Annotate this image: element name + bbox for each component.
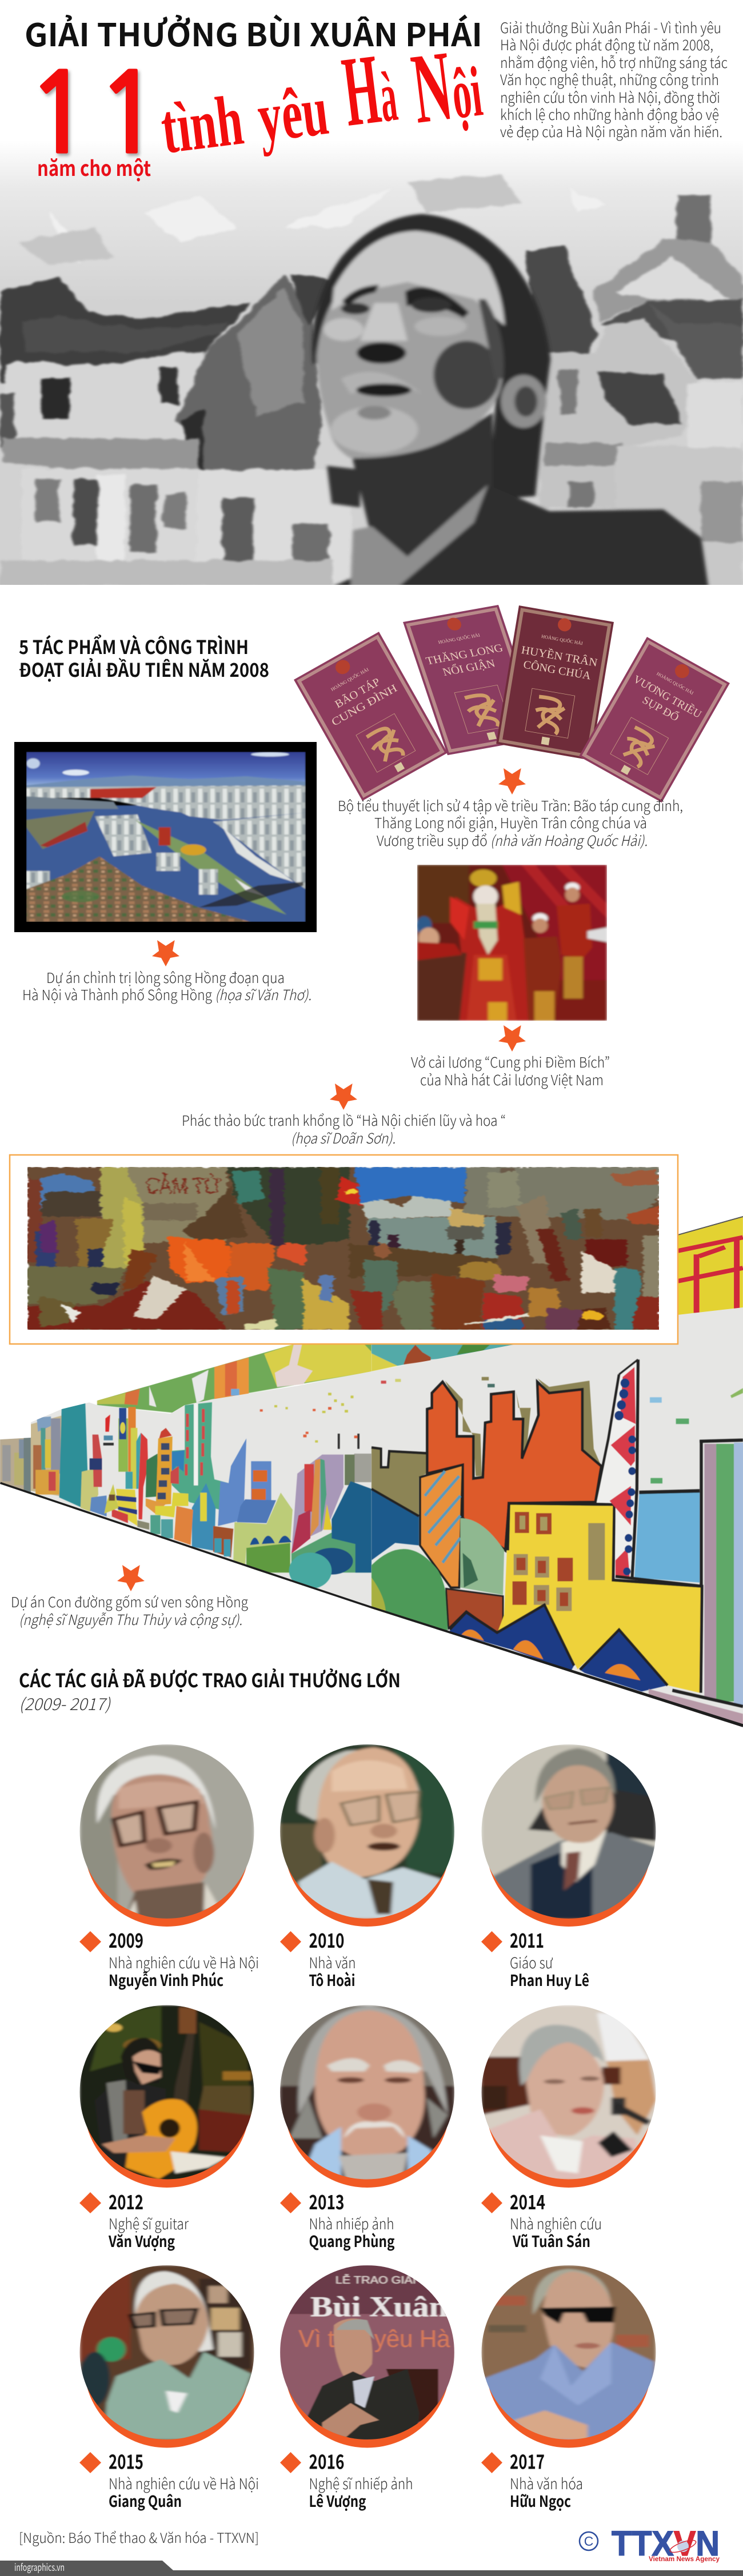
portrait: Phan Huy Le (481, 1744, 656, 1919)
intro paragraph: vẻ đẹp của Hà Nội ngàn năm văn hiến. (500, 121, 722, 142)
text 2013 (309, 2186, 394, 2252)
skyline: left part of mosaic (0, 1393, 372, 1589)
book: Bao tap cung dinh: BÃO TÁP (333, 675, 382, 711)
diamond 2009 (79, 1931, 101, 1952)
painting: Ha Noi chien luy va hoa: CẢM TỬ (145, 1173, 221, 1199)
winner 2010 (279, 1744, 455, 1927)
text 2010 (309, 1925, 355, 1991)
skyline: right part of mosaic (372, 1359, 743, 1729)
caption: books: Bộ tiểu thuyết lịch sử 4 tập về triều Trần: Bão táp cung đình, (338, 795, 683, 816)
intro paragraph: nghiên cứu tôn vinh Hà Nội, đồng thời (500, 86, 720, 107)
book: Huyen Tran cong chua: CÔNG CHÚA (522, 657, 592, 683)
calligraphic title: tinh yeu Ha Noi: tình (157, 81, 247, 169)
text 2009: Nhà nghiên cứu về Hà Nội (109, 1952, 259, 1973)
text 2012 (108, 2186, 189, 2252)
caption: books: Thăng Long nổi giận, Huyền Trân công chúa và (374, 812, 647, 833)
logo: TTXVN Vietnam News Agency: Vietnam News Agency (649, 2555, 720, 2563)
text 2011: Giáo sư (510, 1952, 553, 1973)
text 2012: Văn Vượng (108, 2229, 175, 2252)
front wall: white tile ground (0, 1307, 743, 1727)
portrait: Nguyen Vinh Phuc (79, 1744, 255, 1920)
star: painting (330, 1084, 357, 1110)
text 2016: Nghệ sĩ nhiếp ảnh (309, 2473, 413, 2494)
books: 4-volume historical novel (294, 605, 730, 803)
heading: 5 works: 5 TÁC PHẨM VÀ CÔNG TRÌNH (19, 632, 249, 660)
book: Bao tap cung dinh: CUNG ĐÌNH (329, 681, 400, 729)
text 2015: Giang Quân (109, 2489, 182, 2511)
text 2015: Nhà nghiên cứu về Hà Nội (109, 2473, 259, 2494)
text 2011: 2011 (510, 1925, 544, 1954)
calligraphic title: tinh yeu Ha Noi: Nội (406, 26, 487, 145)
star: city project (152, 940, 179, 966)
text 2009: Nguyễn Vinh Phúc (109, 1968, 223, 1991)
back wall: right yellow section with red frame (678, 1216, 743, 1315)
book: Huyen Tran cong chua: HOÀNG QUỐC HẢI (541, 633, 584, 646)
painting: Ha Noi chien luy va hoa (27, 1167, 660, 1331)
image: cai luong stage performance (417, 865, 607, 1021)
intro paragraph (500, 17, 728, 142)
caption: cai luong (411, 1052, 610, 1090)
text 2009: 2009 (109, 1925, 143, 1954)
hero photo: painter portrait in front of old Hanoi houses (0, 137, 743, 592)
caption: books (338, 795, 683, 850)
text 2012: Nghệ sĩ guitar (109, 2213, 189, 2234)
big number 11: 11 (26, 60, 163, 170)
portrait: Le Vuong at award ceremony (279, 2265, 455, 2441)
heading: award winners: CÁC TÁC GIẢ ĐÃ ĐƯỢC TRAO GIẢI THƯỞNG LỚN (19, 1666, 401, 1693)
intro paragraph: Giải thưởng Bùi Xuân Phái - Vì tình yêu (500, 17, 721, 38)
diamond 2010 (280, 1931, 301, 1952)
intro paragraph: khích lệ cho những hành động bảo vệ (500, 103, 719, 125)
book: Vuong trieu sup do (579, 637, 730, 803)
intro paragraph: Hà Nội được phát động từ năm 2008, (500, 34, 713, 55)
book: Huyen Tran cong chua: HUYỀN TRÂN (520, 643, 598, 669)
caption: ceramic road: Dự án Con đường gốm sứ ven sông Hồng (11, 1591, 248, 1612)
text 2009 (109, 1925, 259, 1991)
text 2017 (510, 2446, 583, 2511)
caption: ceramic road: (nghệ sĩ Nguyễn Thu Thủy và cộng sự). (19, 1609, 242, 1630)
image: Red River city project render (14, 742, 317, 932)
book: Thang Long noi gian: NỔI GIẬN (441, 656, 497, 679)
winner 2015 (79, 2265, 255, 2448)
winner 2016 (279, 2265, 455, 2448)
winner 2009 (79, 1744, 255, 1927)
winner 2013 (279, 2005, 455, 2188)
text 2013: 2013 (309, 2186, 344, 2216)
text 2017: Nhà văn hóa (510, 2473, 583, 2494)
framed box: Ha Noi painting (10, 1155, 678, 1344)
diamond 2016 (280, 2452, 301, 2473)
subheading: years: (2009- 2017) (19, 1691, 111, 1715)
caption: cai luong: Vở cải lương “Cung phi Điềm Bích” (411, 1052, 610, 1072)
caption: books: Vương triều sụp đổ (nhà văn Hoàng Quốc Hải). (377, 830, 648, 850)
portrait: To Hoai (279, 1744, 455, 1919)
text 2011: Phan Huy Lê (510, 1968, 589, 1991)
winner 2011 (481, 1744, 656, 1927)
text 2010: Nhà văn (309, 1952, 355, 1973)
portrait: Le Vuong at award ceremony: LỄ TRAO GIẢI (335, 2274, 416, 2286)
book: Huyen Tran cong chua (496, 605, 614, 760)
text 2010: Tô Hoài (309, 1968, 355, 1991)
text 2014: Nhà nghiên cứu (510, 2213, 602, 2234)
portrait: Huu Ngoc (481, 2265, 656, 2441)
source note: [Nguồn: Báo Thể thao & Văn hóa - TTXVN] (19, 2527, 259, 2547)
calligraphic title: tinh yeu Ha Noi: yêu (254, 71, 333, 158)
text 2013: Nhà nhiếp ảnh (309, 2213, 394, 2234)
text 2012: 2012 (109, 2186, 143, 2216)
book: Thang Long noi gian: THĂNG LONG (424, 641, 505, 667)
book: Thang Long noi gian (403, 605, 543, 755)
caption: painting (182, 1110, 506, 1148)
text 2011 (510, 1925, 589, 1991)
book: Bao tap cung dinh (294, 632, 448, 801)
diamond 2015 (79, 2452, 101, 2473)
text 2017: Hữu Ngọc (510, 2489, 571, 2511)
star: cai luong (498, 1025, 526, 1052)
portrait: Quang Phung (279, 2005, 455, 2181)
caption: painting: (họa sĩ Doãn Sơn). (291, 1127, 396, 1148)
back wall: upper painted layer (97, 1342, 372, 1413)
text 2014 (510, 2186, 602, 2252)
winner 2012 (79, 2005, 255, 2188)
caption: ceramic road (11, 1591, 248, 1630)
caption: city project: Dự án chỉnh trị lòng sông Hồng đoạn qua (46, 967, 285, 988)
text 2014: Vũ Tuân Sán (512, 2229, 590, 2252)
caption: city project (22, 967, 311, 1005)
footer site name: infographics.vn (14, 2559, 65, 2574)
caption: painting: Phác thảo bức tranh khổng lồ “Hà Nội chiến lũy và hoa “ (182, 1110, 506, 1130)
heading: 5 works (19, 632, 269, 683)
logo: TTXVN Vietnam News Agency: TTXVN (612, 2524, 720, 2563)
footer bar (0, 2561, 743, 2576)
calligraphic title: tinh yeu Ha Noi (157, 26, 487, 169)
diamond 2011 (481, 1931, 502, 1952)
winner 2014 (481, 2005, 656, 2188)
bottom edge of mosaic wall (0, 1484, 743, 1726)
book: Vuong trieu sup do: VƯƠNG TRIỀU (631, 673, 704, 721)
text 2010: 2010 (309, 1925, 344, 1954)
diamond 2013 (280, 2192, 301, 2213)
portrait: Giang Quan (79, 2265, 255, 2441)
text 2016: Lê Vượng (309, 2489, 366, 2511)
text 2016: 2016 (309, 2446, 344, 2475)
intro paragraph: Văn học nghệ thuật, những công trình (500, 69, 719, 90)
text 2015 (109, 2446, 259, 2511)
diamond 2014 (481, 2192, 502, 2213)
text 2014: 2014 (510, 2186, 545, 2216)
heading: 5 works: ĐOẠT GIẢI ĐẦU TIÊN NĂM 2008 (19, 655, 269, 683)
book: Bao tap cung dinh: HOÀNG QUỐC HẢI (330, 667, 370, 692)
subtitle: nam cho mot: năm cho một (37, 151, 151, 182)
diamond 2017 (481, 2452, 502, 2473)
book: Thang Long noi gian: HOÀNG QUỐC HẢI (437, 632, 481, 645)
mosaic wall: ceramic road along the Red River (0, 1216, 743, 1729)
portrait: Vu Tuan San (481, 2005, 656, 2180)
star: ceramic road (117, 1565, 145, 1591)
winner 2017 (481, 2265, 656, 2448)
portrait: Le Vuong at award ceremony: Bùi Xuân (310, 2290, 448, 2323)
text 2015: 2015 (109, 2446, 143, 2475)
star: books (498, 768, 526, 795)
diamond 2012 (79, 2192, 101, 2213)
caption: cai luong: của Nhà hát Cải lương Việt Nam (420, 1069, 604, 1090)
book: Vuong trieu sup do: SỤP ĐỔ (640, 694, 681, 724)
text 2016 (309, 2446, 413, 2511)
white fade over top of hero (0, 0, 743, 141)
calligraphic title: tinh yeu Ha Noi: Hà (337, 31, 402, 147)
portrait: Le Vuong at award ceremony: Vì tình yêu Hà (298, 2325, 450, 2352)
caption: city project: Hà Nội và Thành phố Sông Hồng (họa sĩ Văn Thơ). (22, 984, 311, 1005)
text 2013: Quang Phùng (309, 2229, 394, 2252)
title: GIẢI THƯỞNG BÙI XUÂN PHÁI (25, 10, 482, 55)
text 2017: 2017 (510, 2446, 545, 2475)
book: Vuong trieu sup do: HOÀNG QUỐC HẢI (656, 671, 695, 696)
portrait: Van Vuong with guitar (79, 2005, 255, 2180)
logo: TTXVN Vietnam News Agency: C (584, 2534, 593, 2549)
